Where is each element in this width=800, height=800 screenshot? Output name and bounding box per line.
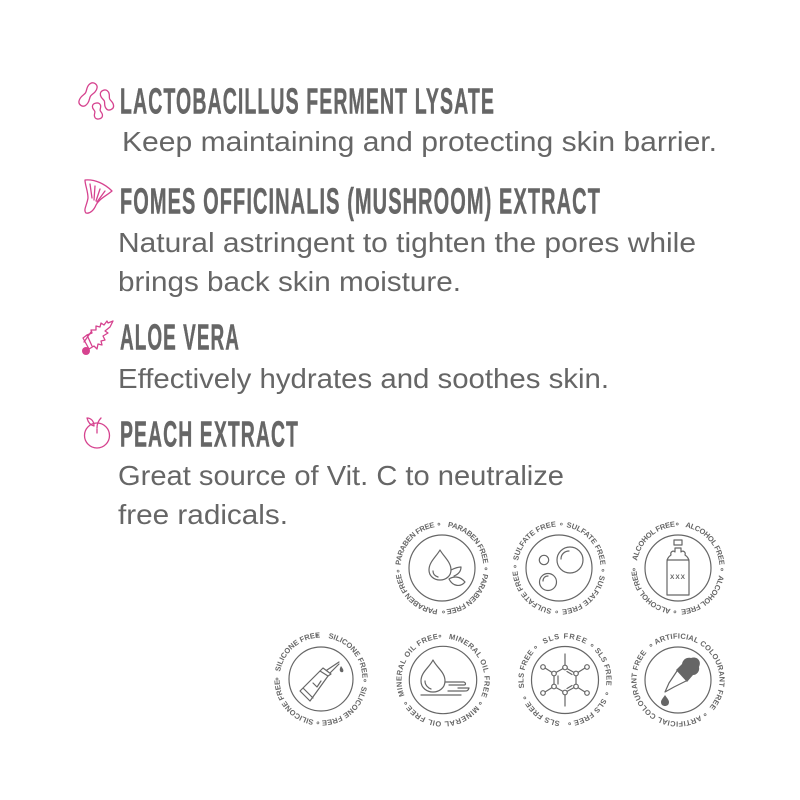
badge: mineral oil free: MINERAL OIL FREE xyxy=(396,634,438,697)
text: mushroom description xyxy=(118,227,696,297)
badge: paraben free: PARABEN FREE xyxy=(446,574,488,614)
badge: mineral oil free: MINERAL OIL FREE xyxy=(449,634,490,698)
icon: lactobacillus bacteria xyxy=(77,81,115,120)
badge: sulfate free: SULFATE FREE xyxy=(562,576,605,615)
badge: sls free: SLS FREE xyxy=(525,701,560,726)
icon: aloe vera xyxy=(82,321,113,355)
badge: sulfate free: SULFATE FREE xyxy=(513,521,556,560)
badge: silicone free: SILICONE FREE xyxy=(328,633,368,678)
icon: peach xyxy=(84,418,110,448)
badge: paraben free: PARABEN FREE xyxy=(448,522,488,564)
badge: artificial colourant free xyxy=(631,633,725,727)
badge: alcohol free xyxy=(632,521,724,615)
badge: sulfate free xyxy=(512,521,606,615)
text: peach description xyxy=(118,460,564,530)
badge: alcohol free: XXX xyxy=(670,574,686,581)
badge: artificial colourant free: ARTIFICIAL COLOURANT FREE xyxy=(655,633,725,710)
badge: artificial colourant free: ARTIFICIAL COLOURANT FREE xyxy=(631,650,701,727)
heading: lactobacillus: LACTOBACILLUS FERMENT LYSATE xyxy=(120,80,495,122)
badge: sulfate free: SULFATE FREE xyxy=(566,522,606,565)
heading: peach: PEACH EXTRACT xyxy=(120,414,299,454)
badge: silicone free: SILICONE FREE xyxy=(322,686,367,726)
text: mushroom description: brings back skin moisture. xyxy=(118,266,461,297)
badge: paraben free: PARABEN FREE xyxy=(396,522,434,565)
badge: paraben free xyxy=(396,522,488,614)
badge: sls free: SLS FREE xyxy=(518,650,534,688)
badge: silicone free: SILICONE FREE xyxy=(275,632,320,672)
badge: alcohol free: ALCOHOL FREE xyxy=(685,522,724,565)
badge: alcohol free: ALCOHOL FREE xyxy=(632,571,671,614)
badge: paraben free: PARABEN FREE xyxy=(396,574,438,614)
badge: alcohol free: ALCOHOL FREE xyxy=(632,521,675,561)
badge: sls free: SLS FREE xyxy=(574,698,606,726)
text: mushroom description: Natural astringent to tighten the pores while xyxy=(118,227,696,258)
heading: aloe vera: ALOE VERA xyxy=(120,316,240,358)
badge: mineral oil free: MINERAL OIL FREE xyxy=(406,705,480,726)
badge: sls free: SLS FREE xyxy=(595,648,612,686)
text: lactobacillus description: Keep maintaining and protecting skin barrier. xyxy=(122,126,717,157)
badge: sls free xyxy=(518,633,612,726)
icon: mushroom xyxy=(85,180,112,213)
badge: sulfate free: SULFATE FREE xyxy=(512,571,552,614)
badge: mineral oil free xyxy=(396,634,490,726)
badge: silicone free xyxy=(274,632,368,726)
text: peach description: free radicals. xyxy=(118,499,288,530)
text: peach description: Great source of Vit. C to neutralize xyxy=(118,460,564,491)
badge: alcohol free: ALCOHOL FREE xyxy=(681,575,724,615)
badge: sls free: SLS FREE xyxy=(542,633,588,644)
text: aloe vera description: Effectively hydrates and soothes skin. xyxy=(118,363,609,394)
badge: silicone free: SILICONE FREE xyxy=(274,680,314,725)
